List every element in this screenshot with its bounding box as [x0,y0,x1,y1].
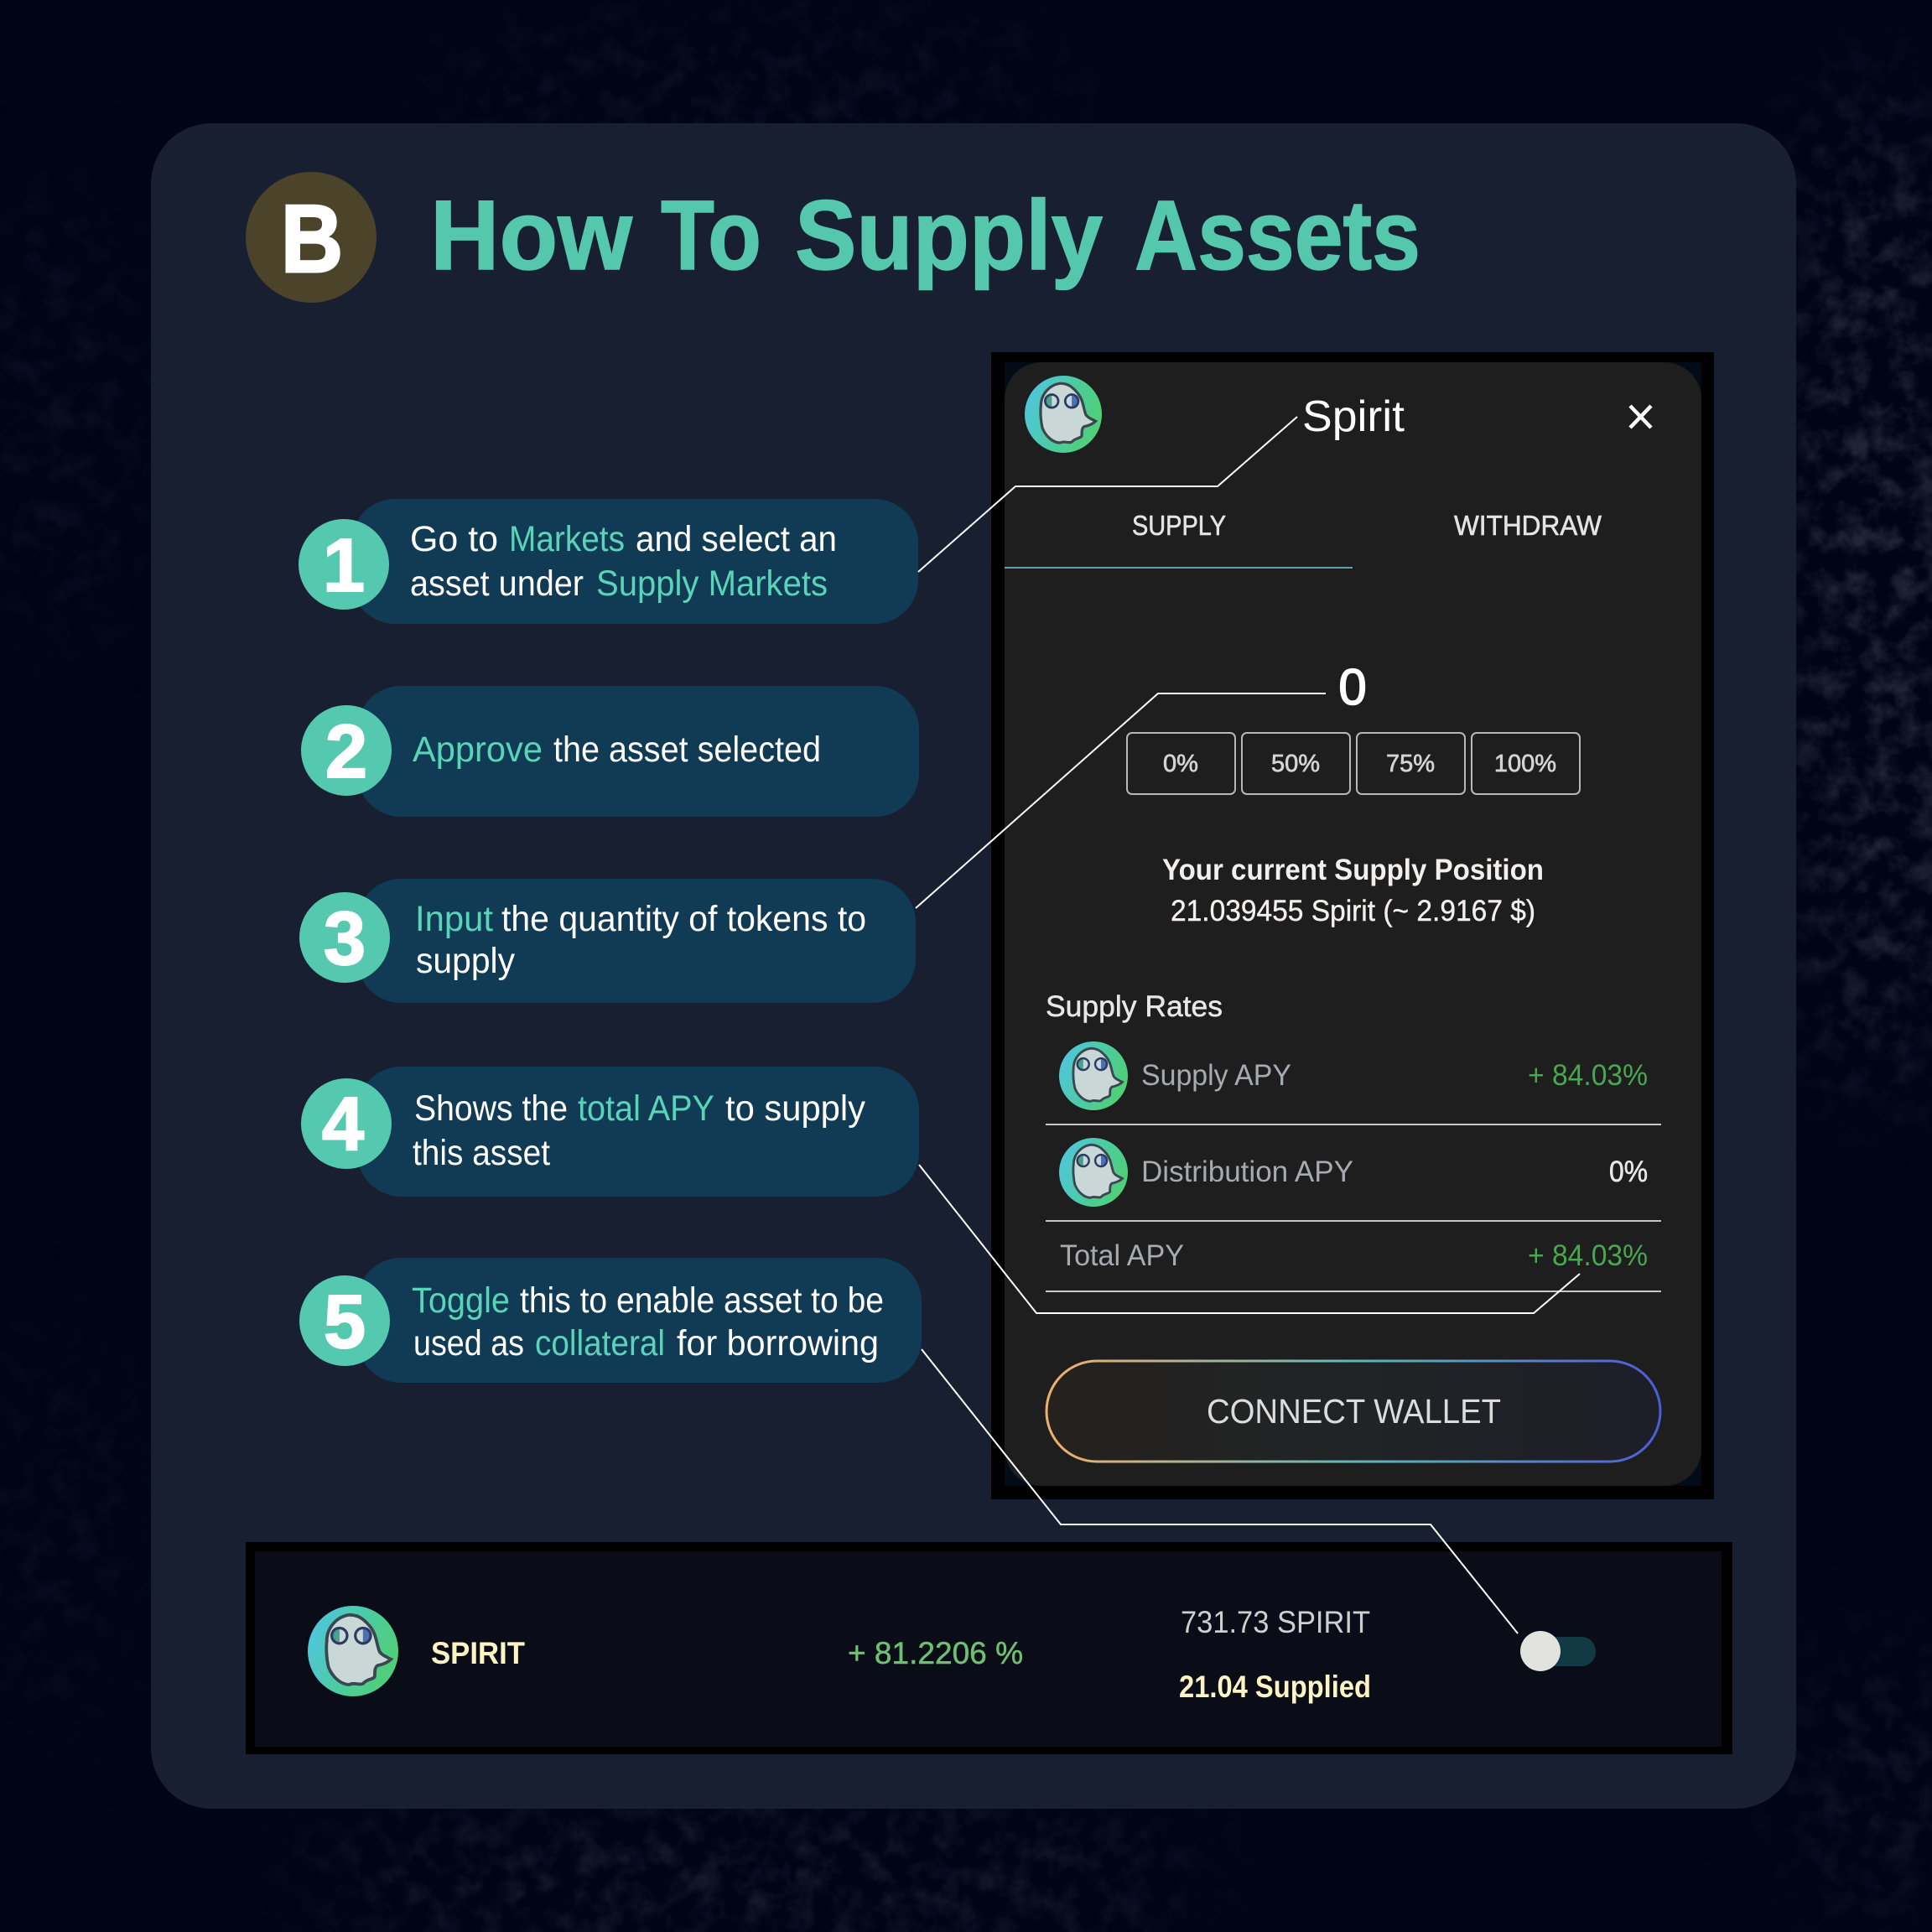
asset name: SPIRIT [431,1636,525,1670]
step 1: and select an [636,519,837,559]
amount input: 0 [1338,659,1367,715]
step 3 [299,879,916,1003]
step 1: Supply Markets [596,564,828,604]
title: How [430,180,633,291]
step 1: 1 [323,524,365,608]
percent buttons [1127,733,1580,794]
modal title: Spirit [1302,392,1405,441]
step 3: Input [415,899,493,939]
arrow: step 5 to toggle [922,1349,1518,1633]
step 5: for borrowing [677,1323,879,1363]
step 3: supply [416,941,515,981]
percent labels: 100% [1494,750,1556,777]
step 4: this asset [413,1133,550,1173]
supply position: 21.039455 Spirit (~ 2.9167 $) [1171,895,1535,927]
title [430,180,1420,291]
step 5 [299,1258,922,1383]
collateral toggle [1520,1631,1596,1671]
panel: supply modal [991,352,1714,1499]
step 1: Go to [410,519,498,559]
rate row: total APY [1060,1239,1648,1272]
tab: withdraw: WITHDRAW [1454,510,1602,541]
step 4 [301,1067,919,1197]
step 4: 4 [322,1083,364,1166]
section badge B [246,172,377,303]
step 3: the quantity of tokens to [501,899,866,939]
title: To [661,180,761,291]
title: Supply [795,180,1103,291]
supply position: Your current Supply Position [1162,854,1544,886]
step 2 [301,686,919,817]
connect wallet button [1046,1361,1660,1462]
percent labels [1163,750,1556,777]
step 5: Toggle [412,1280,510,1321]
supplied balance: 21.04 Supplied [1179,1670,1371,1704]
step 3: 3 [324,897,366,981]
rate row: distribution APY: Distribution APY [1141,1156,1353,1188]
supply position [1162,854,1544,927]
arrow: step 1 to token name [918,417,1297,572]
step 4: Shows the [414,1088,568,1129]
asset APY: + 81.2206 % [848,1636,1023,1670]
step 1 [299,499,918,624]
connect wallet button: CONNECT WALLET [1207,1392,1501,1431]
rate row: total APY: Total APY [1060,1239,1184,1272]
step 1: Markets [509,519,625,559]
section badge B: B [281,186,343,293]
supply rates heading: Supply Rates [1046,990,1223,1023]
wallet balance: 731.73 SPIRIT [1181,1605,1370,1639]
percent labels: 0% [1163,750,1198,777]
percent labels: 75% [1386,750,1435,777]
title: Assets [1135,180,1420,291]
active tab underline [1005,567,1353,569]
arrow: step 4 to total APY [919,1165,1580,1313]
panel: asset row [246,1542,1732,1754]
arrow: step 3 to amount input [916,693,1326,908]
tab: supply: SUPPLY [1132,510,1226,541]
rate row: distribution APY: 0% [1609,1156,1648,1188]
icon: spirit ghost [1025,376,1102,453]
step 5: 5 [324,1280,366,1364]
step 5: collateral [535,1323,665,1363]
icon: spirit ghost [308,1606,398,1696]
rate row: total APY: + 84.03% [1528,1239,1648,1272]
step 2: 2 [325,710,367,794]
step 2: the asset selected [553,730,821,770]
rate row: supply APY [1059,1041,1648,1110]
main card [151,123,1796,1809]
step 4: to supply [725,1088,865,1129]
step 2: Approve [413,730,543,770]
step 1: asset under [410,564,584,604]
rate row: distribution APY [1059,1138,1648,1207]
rate row: supply APY: Supply APY [1141,1059,1291,1092]
rate row: supply APY: + 84.03% [1528,1059,1648,1092]
step 5: this to enable asset to be [520,1280,884,1321]
percent labels: 50% [1271,750,1320,777]
step 4: total APY [578,1088,714,1129]
step 5: used as [413,1323,524,1363]
icon: close [1630,406,1651,428]
